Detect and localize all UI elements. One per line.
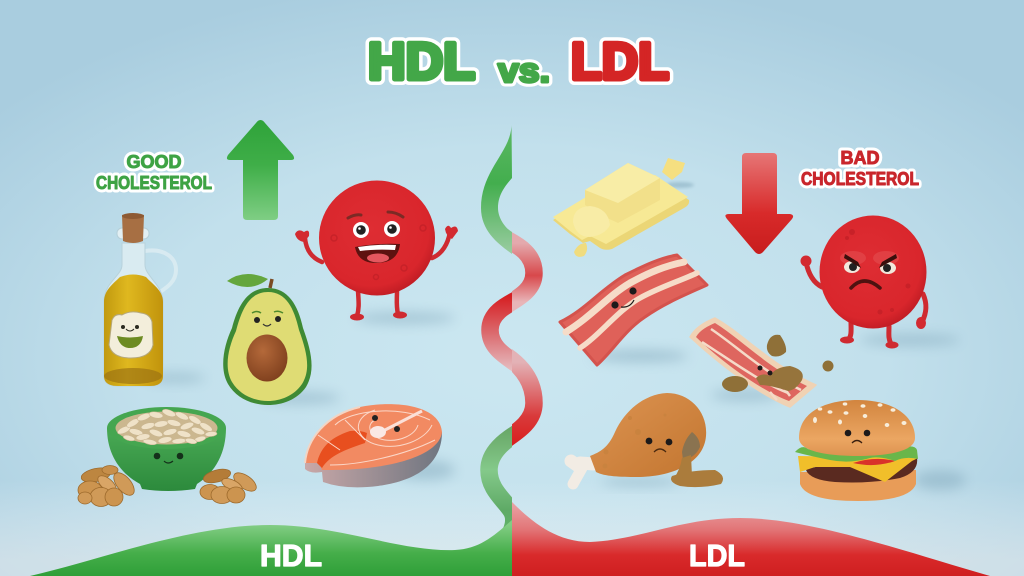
- label: good cholesterol: GOOD: [126, 152, 182, 172]
- label: bad cholesterol: BAD: [840, 148, 880, 168]
- title: HDL vs. LDL: vs.: [498, 52, 550, 90]
- food: salmon steak: [305, 404, 455, 487]
- food: walnuts right: [200, 467, 259, 504]
- wavy central divider: [481, 125, 534, 540]
- red wave: LDL: [512, 502, 990, 576]
- title: HDL vs. LDL: vs.: [498, 52, 550, 90]
- food: oat bowl: [107, 407, 226, 491]
- title: HDL vs. LDL: LDL: [571, 33, 669, 91]
- food: butter on board: [553, 158, 694, 257]
- label: good cholesterol: CHOLESTEROL: [96, 173, 212, 193]
- label: good cholesterol: [96, 152, 212, 193]
- title: HDL vs. LDL: HDL: [368, 33, 475, 91]
- title: HDL vs. LDL: [368, 33, 669, 91]
- title: HDL vs. LDL: LDL: [571, 33, 669, 91]
- food: smiling bacon: [560, 255, 707, 365]
- label: LDL: LDL: [689, 538, 745, 573]
- arrow: HDL up: [227, 120, 294, 220]
- label: bad cholesterol: CHOLESTEROL: [801, 169, 919, 189]
- bottle label: [109, 312, 153, 358]
- food: walnuts left: [78, 466, 138, 506]
- oats: [116, 408, 217, 446]
- food: fried chicken leg: [571, 393, 723, 487]
- food: greasy bacon: [690, 318, 834, 407]
- food: olive oil bottle: [104, 213, 205, 386]
- label: bad cholesterol: CHOLESTEROL: [801, 169, 919, 189]
- character: happy red blood cell: [295, 180, 458, 324]
- arrow: LDL down: [725, 153, 793, 254]
- handle: [145, 250, 176, 292]
- food: avocado: [223, 274, 340, 405]
- label: good cholesterol: CHOLESTEROL: [96, 173, 212, 193]
- food: sad burger: [795, 400, 966, 501]
- label: HDL: HDL: [260, 538, 322, 573]
- label: good cholesterol: GOOD: [126, 152, 182, 172]
- label: bad cholesterol: [801, 148, 919, 189]
- title: HDL vs. LDL: HDL: [368, 33, 475, 91]
- label: bad cholesterol: BAD: [840, 148, 880, 168]
- green wave: HDL: [0, 520, 512, 576]
- character: angry red blood cell: [800, 216, 960, 348]
- bottom fade: [0, 480, 1024, 576]
